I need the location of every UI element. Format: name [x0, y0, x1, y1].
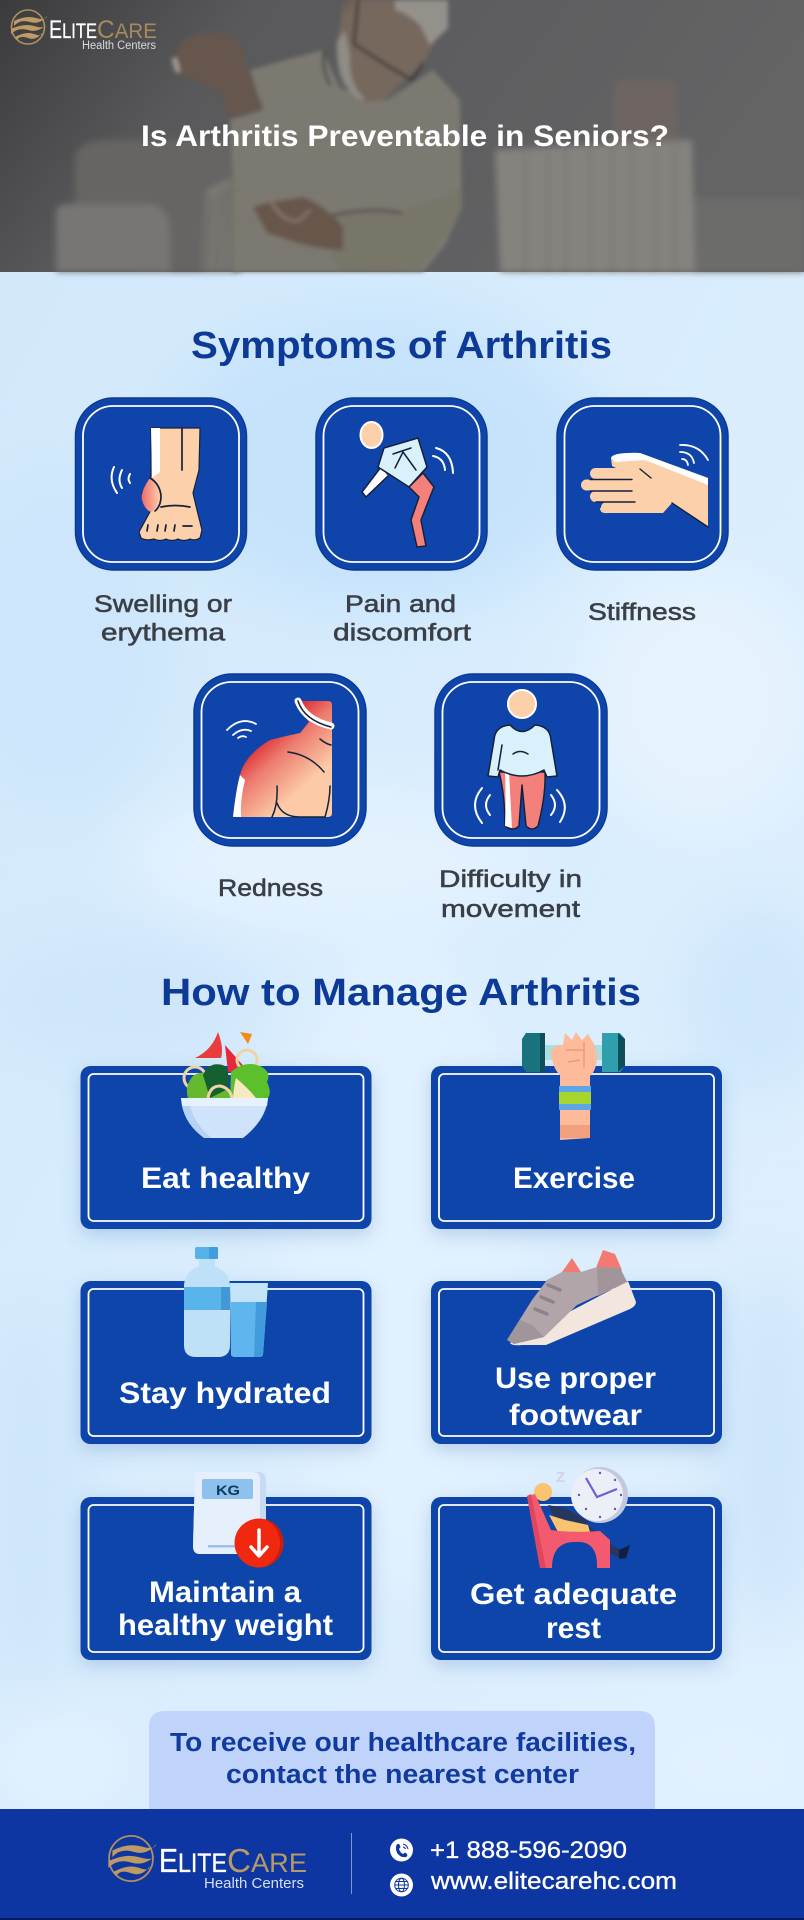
label: Difficulty in	[439, 866, 582, 893]
logo mark	[11, 10, 47, 44]
card panel	[431, 1497, 722, 1660]
contact: website: www.elitecarehc.com	[430, 1868, 677, 1895]
logo: Elite Care header: Health Centers	[82, 40, 156, 52]
icon: sneaker	[507, 1250, 636, 1345]
label: Get adequate	[470, 1578, 677, 1611]
label: footwear	[509, 1399, 642, 1432]
card panel	[80, 1497, 372, 1660]
footer band	[0, 1809, 804, 1920]
callout text: contact the nearest center	[226, 1761, 579, 1789]
hero photo banner	[0, 0, 804, 272]
logo: Elite Care footer: CARE	[227, 1842, 307, 1879]
symptom: swelling or erythema	[76, 398, 246, 646]
scale unit: KG	[216, 1482, 240, 1498]
label	[333, 591, 471, 646]
contact: phone: +1 888-596-2090	[430, 1837, 627, 1864]
icon: globe	[390, 1874, 413, 1896]
logo: Elite Care header	[11, 10, 157, 52]
logo wordmark: ELITE	[49, 16, 97, 44]
label: rest	[546, 1612, 601, 1645]
label: Stay hydrated	[119, 1377, 331, 1410]
callout: contact	[149, 1711, 655, 1809]
card: stay hydrated	[80, 1247, 372, 1444]
label: Use proper	[495, 1362, 656, 1395]
photo: man	[174, 0, 462, 272]
label: discomfort	[333, 620, 471, 646]
icon: knee pain	[360, 422, 453, 547]
label: healthy weight	[118, 1609, 333, 1642]
icon: person standing	[475, 690, 565, 829]
icon: stiff hand	[581, 445, 708, 527]
photo: room and furniture	[56, 80, 804, 272]
label	[495, 1362, 656, 1432]
icon: water bottle and glass	[184, 1247, 268, 1357]
logo: Elite Care footer	[108, 1836, 307, 1892]
label: Exercise	[513, 1162, 635, 1195]
icon tile	[194, 674, 366, 846]
label: erythema	[101, 620, 225, 646]
label	[118, 1576, 333, 1642]
icon: weighing scale	[193, 1472, 284, 1568]
label: Redness	[218, 875, 323, 902]
symptom: pain and discomfort	[316, 398, 487, 646]
card: healthy weight	[80, 1472, 372, 1660]
icon: salad bowl	[181, 1032, 270, 1138]
logo: Elite Care header: CARE	[97, 16, 157, 44]
icon tile	[435, 674, 607, 846]
callout text	[170, 1729, 636, 1789]
icon: swollen ankle	[112, 428, 202, 540]
card: exercise	[431, 1032, 722, 1229]
label: Pain and	[345, 591, 456, 618]
label	[470, 1578, 677, 1645]
label: Eat healthy	[141, 1162, 310, 1195]
label: Stiffness	[588, 599, 696, 626]
card: adequate rest	[431, 1467, 722, 1660]
label	[439, 866, 582, 923]
callout text: To receive our healthcare facilities,	[170, 1729, 636, 1757]
card panel	[80, 1281, 372, 1444]
icon tile	[557, 398, 728, 570]
card: proper footwear	[431, 1250, 722, 1444]
title: Is Arthritis Preventable in Seniors?	[141, 120, 669, 153]
heading: symptoms: Symptoms of Arthritis	[191, 325, 612, 367]
icon: fist with dumbbell	[522, 1032, 625, 1140]
label: Maintain a	[149, 1576, 301, 1609]
logo wordmark: ELITE	[159, 1842, 227, 1879]
label	[94, 591, 232, 646]
card panel	[431, 1066, 722, 1229]
card panel	[431, 1281, 722, 1444]
icon tile	[316, 398, 487, 570]
card: eat healthy	[80, 1032, 372, 1229]
label: movement	[441, 896, 580, 923]
icon: resting in armchair with clock: Z	[556, 1469, 565, 1486]
symptom: difficulty in movement	[435, 674, 607, 923]
icon: phone	[390, 1838, 413, 1862]
icon: red shoulder	[227, 701, 332, 817]
card panel	[80, 1066, 372, 1229]
logo mark	[108, 1836, 156, 1881]
logo: Elite Care footer: Health Centers	[204, 1875, 304, 1892]
symptom: stiffness	[557, 398, 728, 626]
heading: manage: How to Manage Arthritis	[161, 972, 641, 1014]
icon: resting in armchair with clock	[527, 1467, 630, 1568]
label: Swelling or	[94, 591, 232, 618]
divider	[351, 1833, 352, 1894]
icon tile	[76, 398, 246, 570]
symptom: redness	[194, 674, 366, 902]
